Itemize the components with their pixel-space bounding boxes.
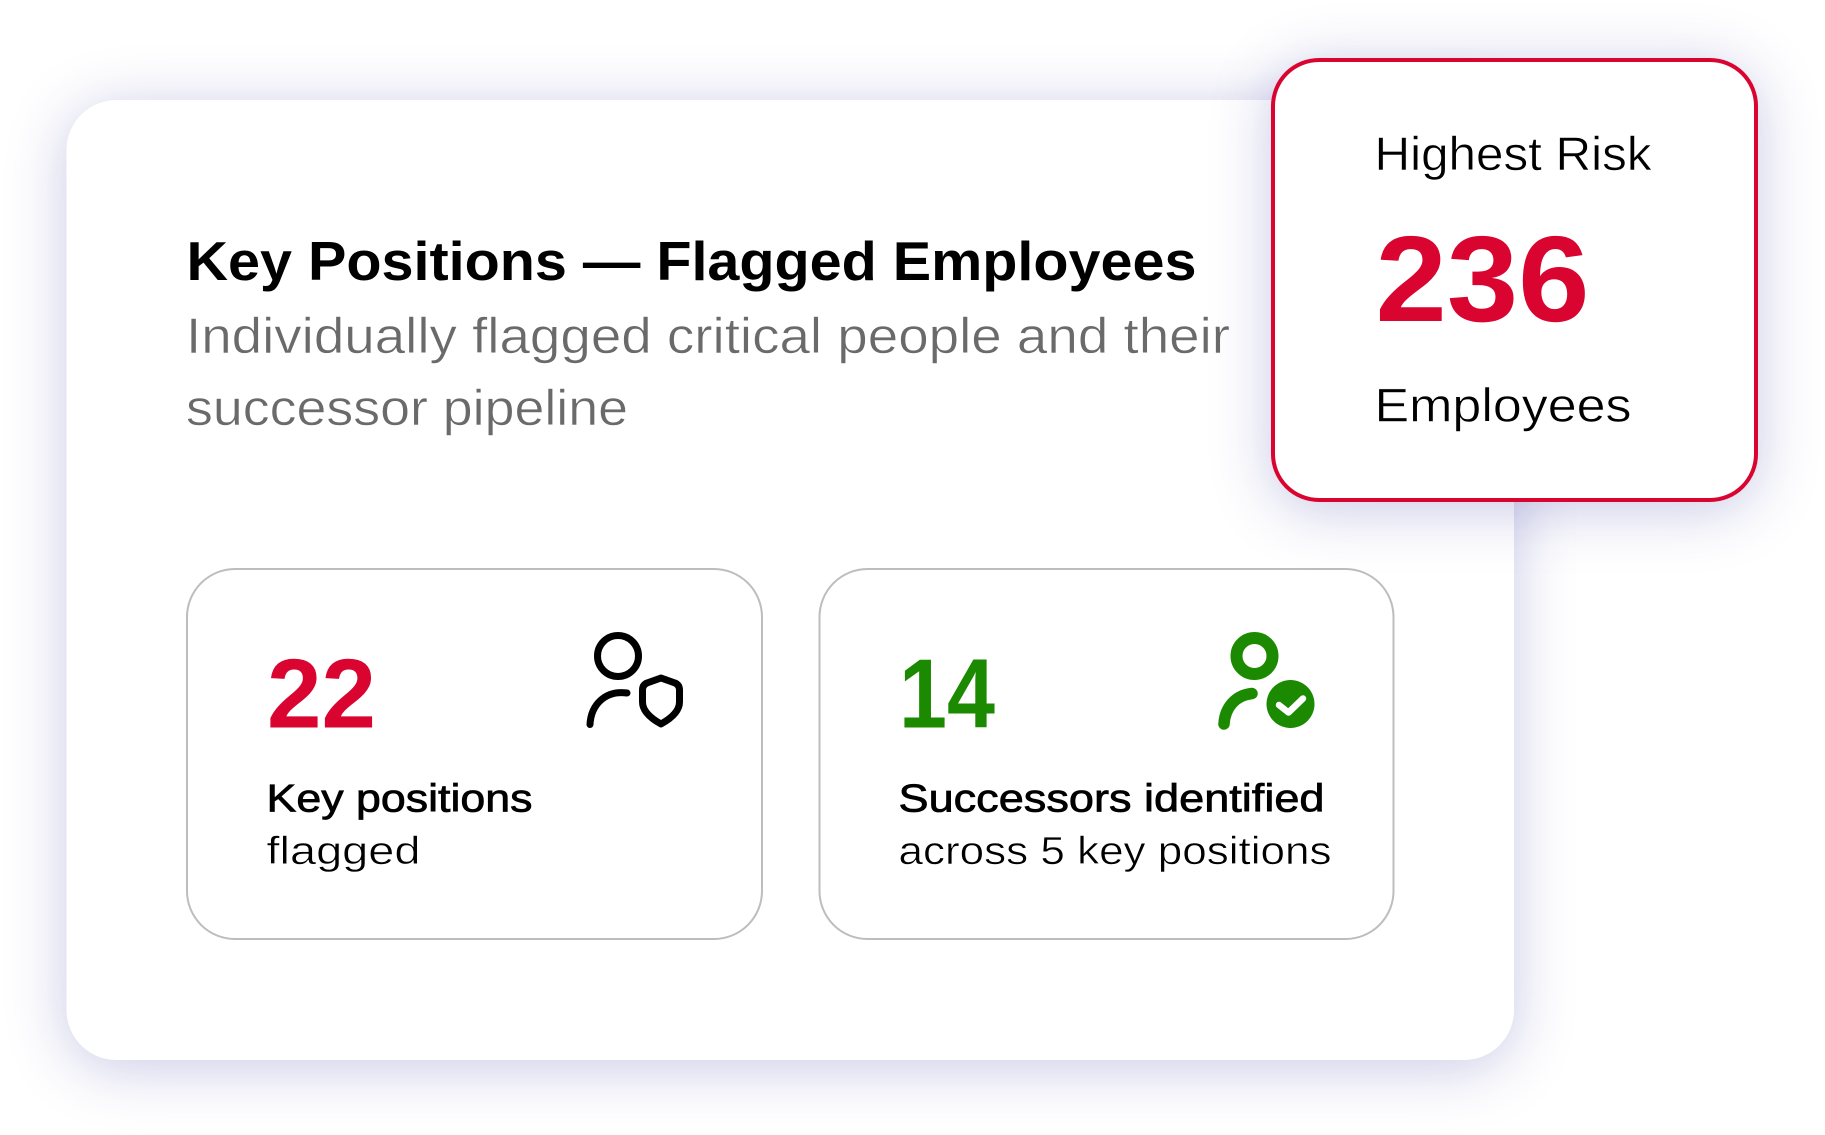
subtitle: Individually flagged critical people and their: [186, 308, 1230, 364]
stat label: flagged: [266, 830, 420, 873]
panel: successors identified stat: [820, 569, 1394, 939]
stat label: [898, 778, 1332, 873]
stat number: 22: 22: [267, 638, 376, 748]
stat label: [266, 778, 532, 873]
icon: person with shield: [590, 636, 680, 724]
callout label: Employees: [1374, 378, 1632, 432]
panel: key positions main card: [66, 100, 1514, 1060]
subtitle: [186, 308, 1230, 436]
callout number: 236: 236: [1376, 211, 1590, 347]
stat label: Successors identified: [898, 778, 1324, 820]
stat number: 14: 14: [899, 638, 995, 748]
subtitle: successor pipeline: [186, 380, 628, 436]
panel: highest risk callout: [1273, 60, 1756, 500]
title: Key Positions — Flagged Employees: [186, 230, 1196, 292]
icon: person with check: [1224, 638, 1314, 728]
callout heading: Highest Risk: [1374, 127, 1652, 180]
stat label: Key positions: [266, 778, 532, 820]
panel: key positions flagged stat: [187, 569, 762, 939]
stat label: across 5 key positions: [898, 830, 1332, 873]
